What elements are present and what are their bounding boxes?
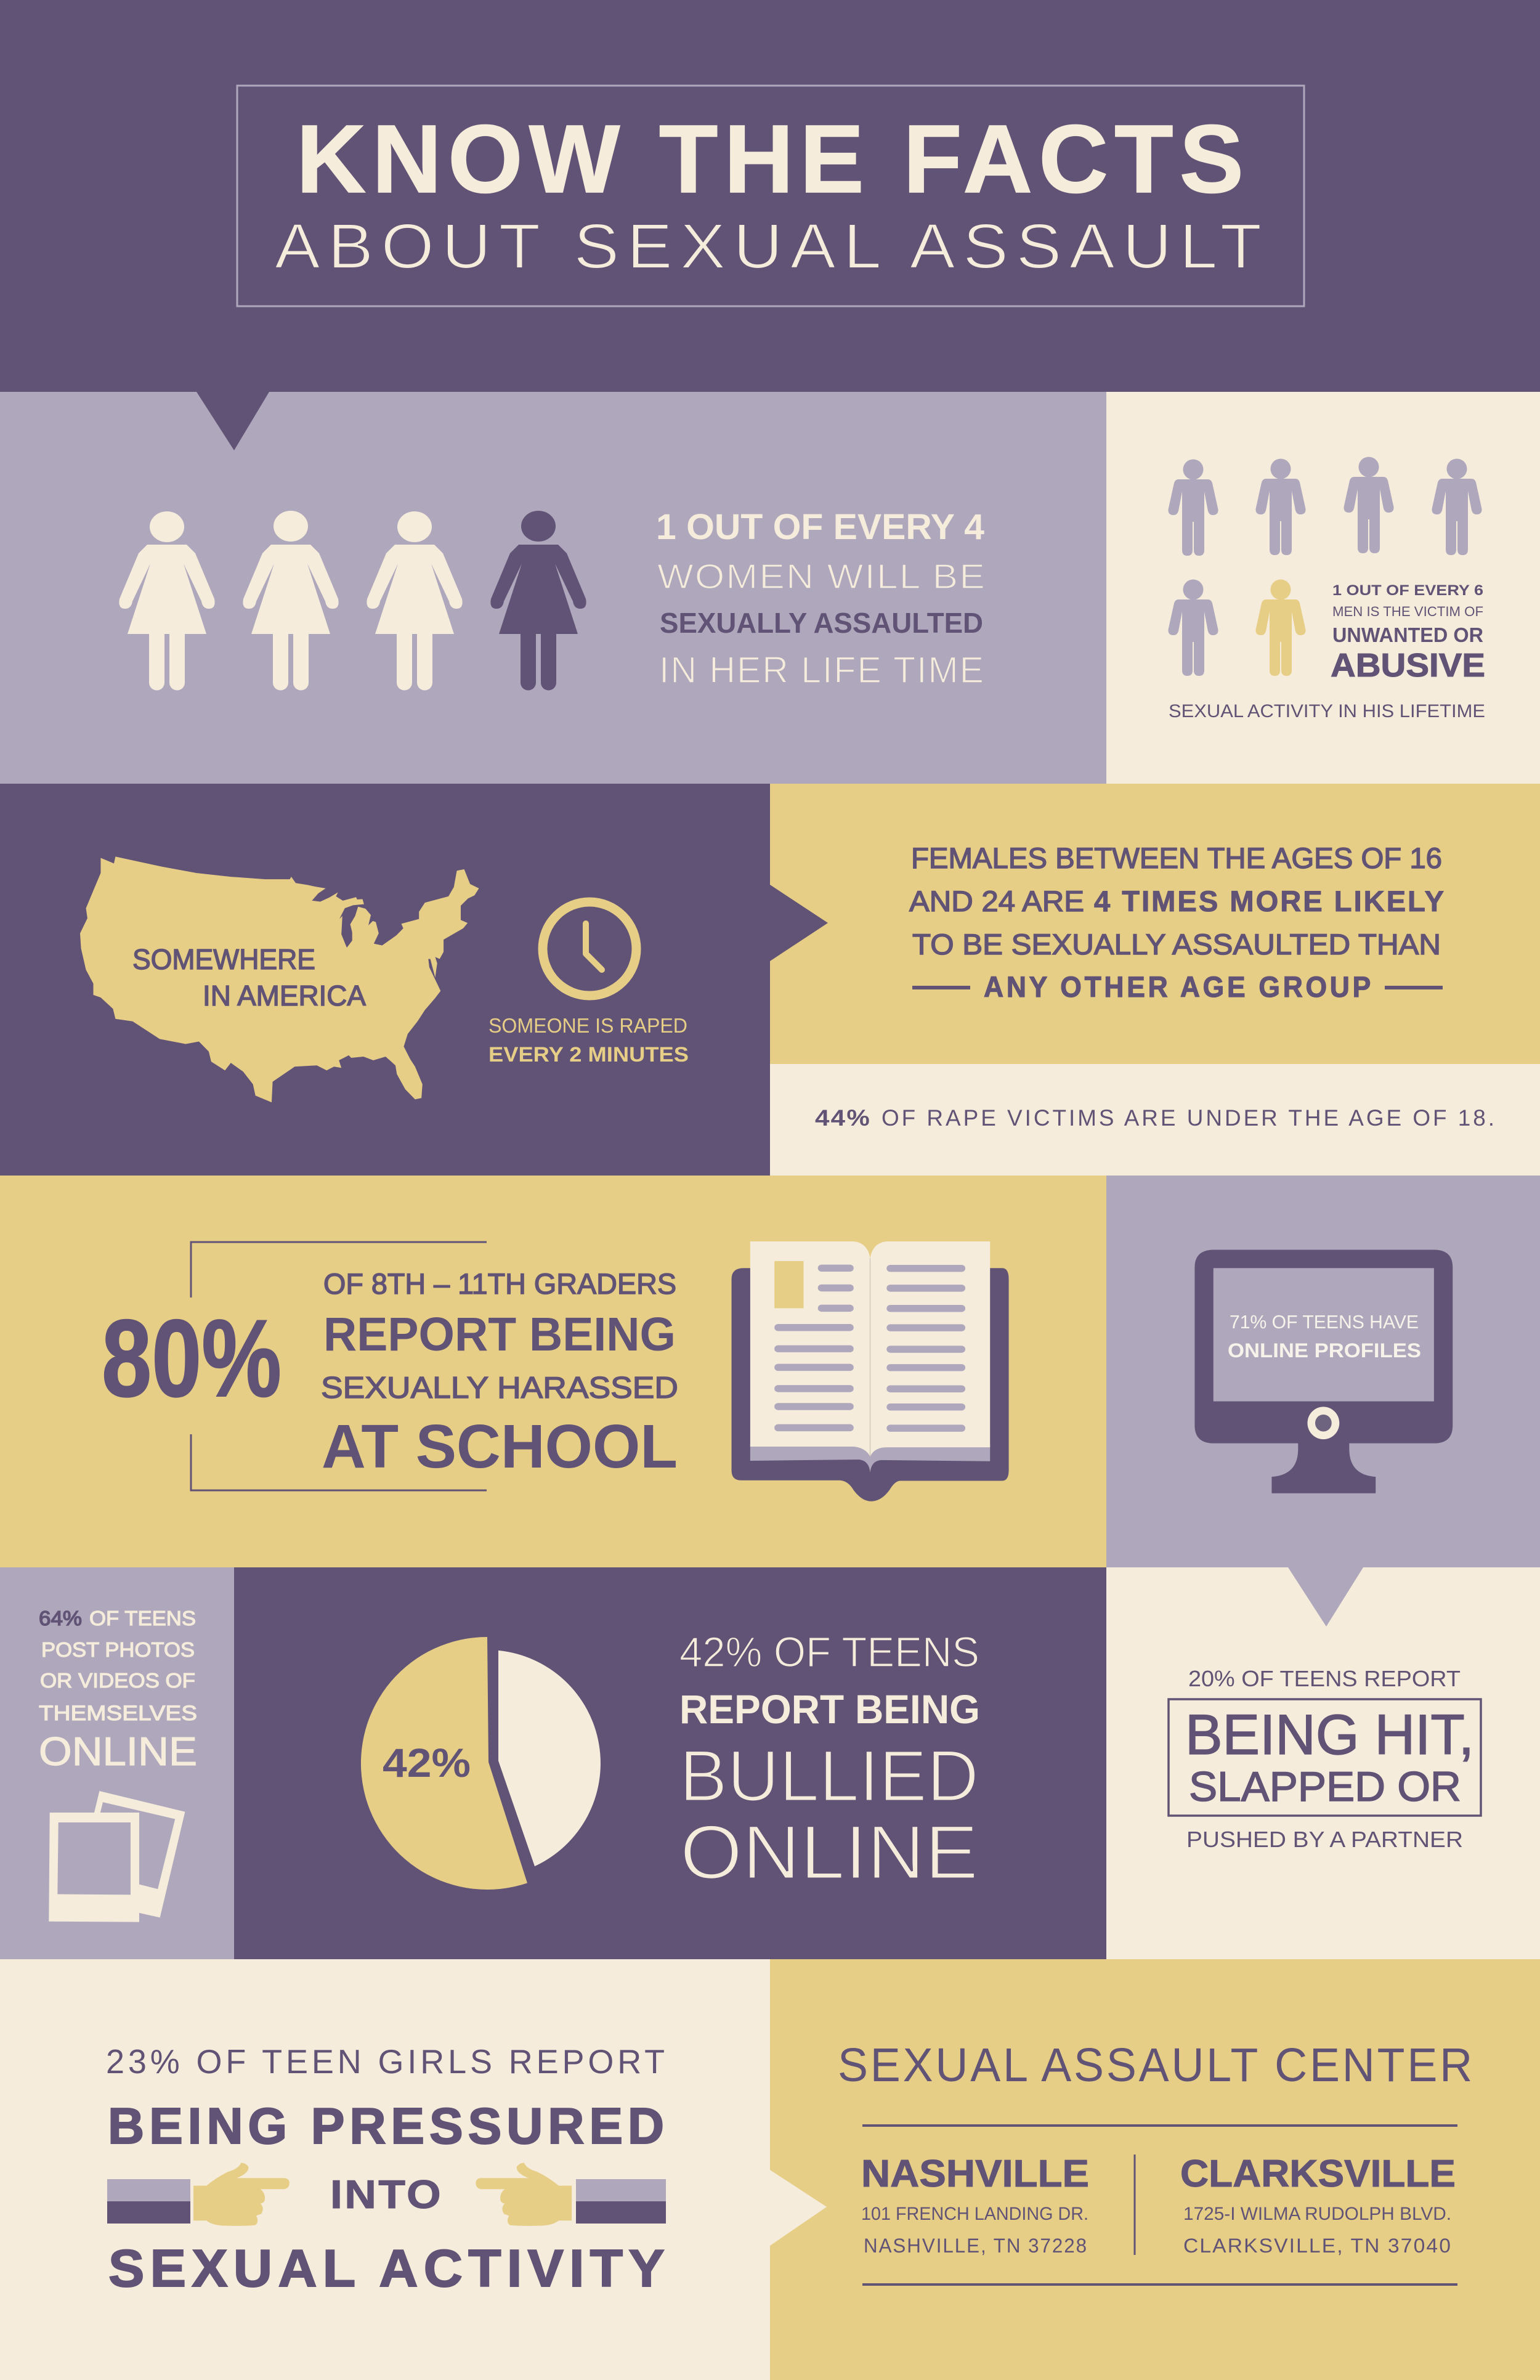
text: 42 percent bullied online: BULLIED <box>679 1736 979 1817</box>
text: 1 out of every 6 men <box>1169 582 1485 721</box>
pie chart: 42 percent <box>361 1637 601 1890</box>
text: being pressured: BEING PRESSURED <box>108 2097 669 2155</box>
text: 42 percent bullied online: ONLINE <box>680 1810 978 1895</box>
text: into: INTO <box>330 2172 443 2217</box>
address: Nashville <box>861 2153 1089 2257</box>
text: 64 percent post photos: THEMSELVES <box>39 1702 197 1725</box>
text: 20 percent of teens report: 20% OF TEENS REPORT <box>1188 1666 1461 1691</box>
pie label: 42% <box>383 1740 471 1785</box>
text: somewhere in America: IN AMERICA <box>203 980 366 1012</box>
text: 4 times more likely: FEMALES BETWEEN THE AGES OF 16 <box>911 842 1442 874</box>
text: 1 out of every 6 men: ABUSIVE <box>1331 647 1485 684</box>
text: 4 times more likely: TO BE SEXUALLY ASSAULTED THAN <box>912 928 1441 961</box>
text: 4 times more likely: AND 24 ARE <box>909 885 1084 917</box>
text: 1 out of every 4 women: WOMEN WILL BE <box>657 557 986 596</box>
text: 1 out of every 6 men: 1 OUT OF EVERY 6 <box>1332 582 1483 599</box>
panel: online profiles <box>1106 1176 1540 1567</box>
text: somewhere in America: SOMEWHERE <box>132 943 315 975</box>
panel: sexual assault center <box>770 1959 1540 2380</box>
arrow: monitor pointer <box>1288 1567 1363 1627</box>
callout box <box>1169 1699 1481 1816</box>
text: 1 out of every 4 women <box>656 507 986 691</box>
icon: polaroid photos <box>49 1791 185 1922</box>
address: Clarksville: 1725-I WILMA RUDOLPH BLVD. <box>1183 2204 1451 2224</box>
text: 44 percent of rape victims: 44% <box>815 1105 871 1131</box>
text: report being sexually harassed at school <box>321 1267 678 1481</box>
text: 1 out of every 6 men: SEXUAL ACTIVITY IN HIS LIFETIME <box>1169 701 1485 721</box>
icon: left pointing hand <box>107 2163 290 2226</box>
icon: row of six men <box>1168 457 1482 676</box>
icon: open book <box>732 1241 1009 1501</box>
text: 42 percent bullied online <box>679 1628 980 1895</box>
address: Clarksville <box>1180 2153 1456 2257</box>
text: being hit slapped or: BEING HIT, <box>1185 1704 1474 1766</box>
address: Clarksville: CLARKSVILLE <box>1180 2153 1456 2195</box>
text: 71 percent online profiles: 71% OF TEENS HAVE <box>1230 1311 1419 1333</box>
text: being hit slapped or: SLAPPED OR <box>1189 1763 1461 1810</box>
stat: 80 percent: 80% <box>102 1297 282 1419</box>
arrow: header pointer <box>197 392 269 450</box>
text: someone is raped every 2 minutes: EVERY 2 MINUTES <box>488 1043 689 1066</box>
address: Nashville: 101 FRENCH LANDING DR. <box>861 2204 1088 2224</box>
arrow: footer pointer <box>770 2170 827 2246</box>
text: 64 percent post photos: OF TEENS <box>89 1607 196 1630</box>
text: 64 percent post photos: OR VIDEOS OF <box>40 1669 195 1692</box>
address: Clarksville: CLARKSVILLE, TN 37040 <box>1183 2235 1452 2257</box>
icon: clock <box>543 902 636 996</box>
subtitle: ABOUT SEXUAL ASSAULT <box>275 211 1270 282</box>
icon: computer monitor <box>1194 1249 1453 1493</box>
panel: 1 in 6 men <box>1106 392 1540 784</box>
address: Nashville: NASHVILLE <box>861 2153 1089 2195</box>
text: report being sexually harassed at school: OF 8TH – 11TH GRADERS <box>323 1267 676 1300</box>
text: 1 out of every 4 women: 1 OUT OF EVERY 4 <box>656 507 984 547</box>
text: 71 percent online profiles <box>1228 1311 1421 1362</box>
title: KNOW THE FACTS <box>296 105 1250 213</box>
text: 64 percent post photos: ONLINE <box>39 1729 197 1774</box>
text: 42 percent bullied online: 42% OF TEENS <box>679 1628 979 1676</box>
text: report being sexually harassed at school: AT SCHOOL <box>322 1412 678 1481</box>
text: 42 percent bullied online: REPORT BEING <box>679 1686 980 1732</box>
title frame <box>237 86 1304 306</box>
panel: bullied online <box>234 1567 1106 1959</box>
panel: 80 percent at school <box>0 1176 1106 1567</box>
text: 4 times more likely: ANY OTHER AGE GROUP <box>984 970 1374 1003</box>
panel: header <box>0 0 1540 394</box>
heading: sexual assault center: SEXUAL ASSAULT CENTER <box>838 2039 1475 2092</box>
text: somewhere in America <box>132 943 366 1012</box>
text: being hit slapped or <box>1185 1704 1474 1810</box>
text: report being sexually harassed at school: REPORT BEING <box>323 1308 676 1361</box>
text: 1 out of every 6 men: UNWANTED OR <box>1332 623 1483 646</box>
text: 1 out of every 4 women: IN HER LIFE TIME <box>659 649 985 691</box>
icon: map of the USA <box>80 856 479 1102</box>
panel: 1 in 4 women <box>0 392 1106 784</box>
text: 71 percent online profiles: ONLINE PROFILES <box>1228 1339 1421 1362</box>
panel: being hit <box>1106 1567 1540 1959</box>
arrow: map pointer <box>770 885 828 961</box>
text: 64 percent post photos: POST PHOTOS <box>41 1638 195 1661</box>
text: someone is raped every 2 minutes <box>488 1014 689 1066</box>
text: 1 out of every 6 men: MEN IS THE VICTIM OF <box>1332 604 1483 619</box>
icon: row of four women <box>119 511 586 690</box>
text: someone is raped every 2 minutes: SOMEONE IS RAPED <box>488 1014 687 1037</box>
text: 64 percent post photos <box>39 1607 197 1774</box>
panel: photos online <box>0 1567 234 1959</box>
text: 4 times more likely <box>909 842 1446 1003</box>
text: 64 percent post photos: 64% <box>39 1607 82 1630</box>
panel: females 16 to 24 <box>770 784 1540 1064</box>
address: Nashville: NASHVILLE, TN 37228 <box>864 2235 1088 2257</box>
text: 44 percent of rape victims: OF RAPE VICTIMS ARE UNDER THE AGE OF 18. <box>881 1105 1497 1131</box>
panel: pressured into sexual activity <box>0 1959 770 2380</box>
text: pushed by a partner: PUSHED BY A PARTNER <box>1186 1827 1463 1852</box>
panel: 44 percent under 18 <box>770 1064 1540 1176</box>
text: 4 times more likely: 4 TIMES MORE LIKELY <box>1094 885 1446 917</box>
text: 1 out of every 4 women: SEXUALLY ASSAULTED <box>660 607 983 639</box>
text: report being sexually harassed at school: SEXUALLY HARASSED <box>321 1371 678 1405</box>
bracket <box>191 1242 487 1490</box>
icon: right pointing hand <box>476 2163 666 2226</box>
text: sexual activity: SEXUAL ACTIVITY <box>108 2240 670 2298</box>
text: 23 percent of teen girls: 23% OF TEEN GIRLS REPORT <box>106 2042 668 2081</box>
panel: every 2 minutes <box>0 784 770 1176</box>
